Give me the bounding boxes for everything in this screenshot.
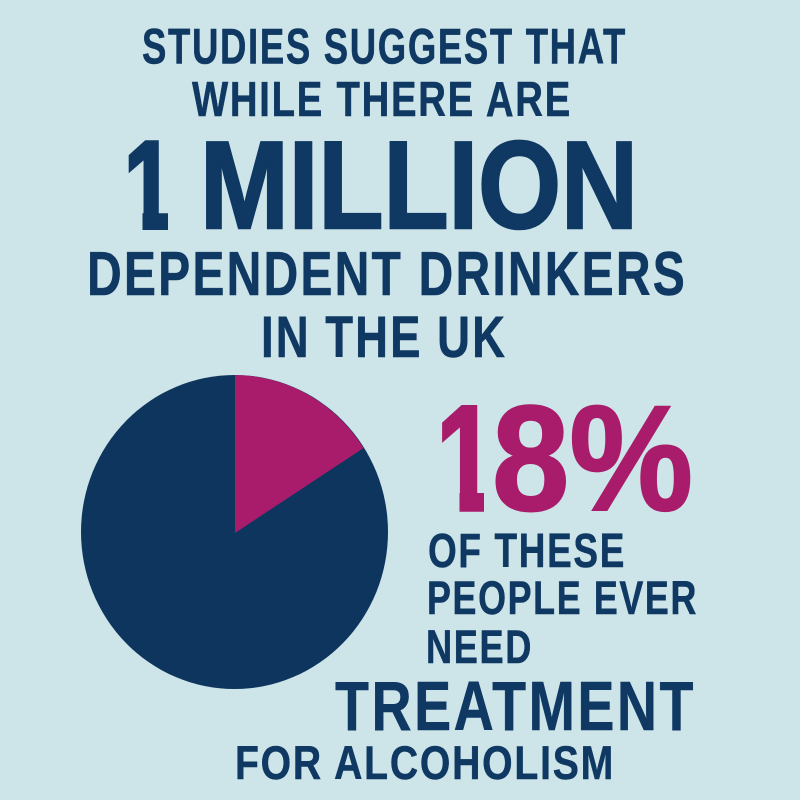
description line: of these: OF THESE (428, 525, 626, 578)
description block (235, 525, 698, 789)
description line: for alcoholism: FOR ALCOHOLISM (235, 736, 615, 789)
digits eight and percent: 8% (492, 374, 693, 542)
word million: MILLION (200, 117, 638, 255)
emphasis word: treatment: TREATMENT (335, 667, 696, 745)
heading line: while there are: WHILE THERE ARE (192, 73, 572, 127)
pie slice: 18 percent (235, 375, 364, 533)
pie slice: remaining share (81, 375, 388, 689)
heading block (87, 18, 687, 370)
pie chart: 18 percent share (81, 375, 388, 689)
heading line: in the uk: IN THE UK (261, 305, 507, 370)
statistic: 18 percent (425, 374, 693, 542)
digit one: 1 (124, 117, 174, 255)
heading line: studies suggest that: STUDIES SUGGEST THAT (142, 18, 627, 74)
description line: people ever: PEOPLE EVER (427, 571, 698, 624)
headline figure: 1 million (112, 117, 638, 255)
description line: need: NEED (426, 620, 533, 673)
digit one: 1 (436, 374, 496, 542)
